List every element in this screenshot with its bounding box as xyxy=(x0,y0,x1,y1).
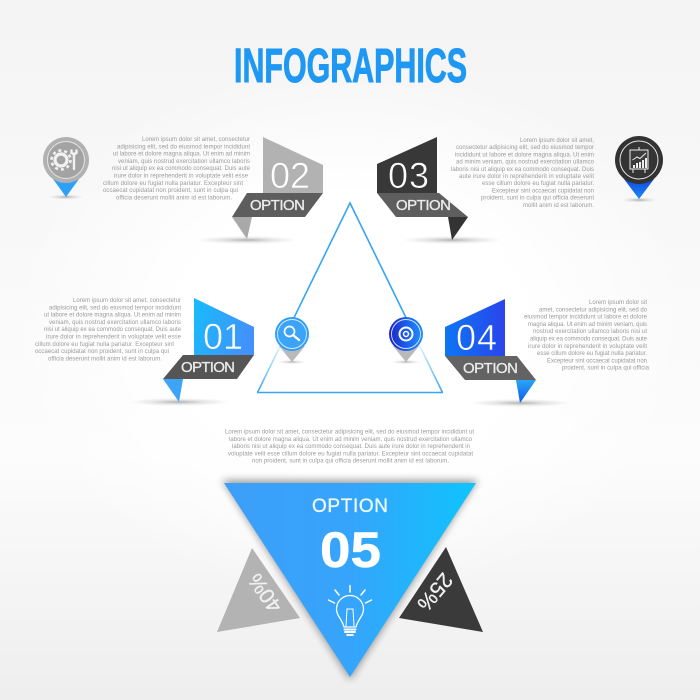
text block: 03: incididunt ut labore et dolore magna aliqua. Ut enim xyxy=(455,152,594,158)
text block: 03: aute irure dolor in reprehenderit in voluptate velit xyxy=(459,174,594,180)
option tag 04 xyxy=(445,299,570,407)
icon: chart board xyxy=(630,147,648,173)
text block: 05: Lorem ipsum dolor sit amet, consectetur adipisicing elit, sed do eiusmod tempor incididunt ut xyxy=(225,430,474,436)
option tag 01: 01 xyxy=(203,316,243,357)
side flag: 40%: 40% xyxy=(244,569,287,617)
main triangle: option 05: OPTION xyxy=(312,496,388,517)
text block: 01: occaecat cupidatat non proident, sunt in culpa qui xyxy=(35,349,169,355)
text block: 02: adipisicing elit, sed do eiusmod tempor incididunt xyxy=(117,144,250,150)
icon: wrench xyxy=(72,150,76,169)
text block: 01: irure dolor in reprehenderit in voluptate velit esse xyxy=(46,334,182,340)
text block: 02: Lorem ipsum dolor sit amet, consectetur xyxy=(142,137,250,143)
text block: 05: non proident, sunt in culpa qui officia deserunt mollit anim id est laborum. xyxy=(252,459,449,465)
side flag: 25%: 25% xyxy=(412,568,457,615)
main triangle: option 05: 05 xyxy=(320,522,381,578)
main triangle: option 05 xyxy=(222,480,478,680)
option tag 02 xyxy=(197,137,323,244)
text block: 03: Lorem ipsum dolor sit amet, xyxy=(520,138,594,144)
text block: 04: eiusmod tempor incididunt ut labore et dolore xyxy=(524,315,648,321)
text block: 04: nostrud exercitation ullamco laboris nisi ut xyxy=(533,329,647,335)
pin: target xyxy=(389,317,423,364)
option tag 02: OPTION xyxy=(250,197,305,214)
text block: 04: irure dolor in reprehenderit in voluptate velit xyxy=(528,344,647,350)
text block: 03: proident, sunt in culpa qui officia deserunt xyxy=(481,196,594,202)
text block: 03: consectetur adipisicing elit, sed do eiusmod tempor xyxy=(456,145,594,151)
icon: magnifier xyxy=(284,326,299,340)
text block: 04: proident, sunt in culpa qui officia xyxy=(562,366,650,372)
text block: 02: veniam, quis nostrud exercitation ullamco laboris xyxy=(118,159,250,165)
icon: light bulb xyxy=(328,586,372,635)
pin: search xyxy=(275,317,309,364)
pin: gear and wrench xyxy=(43,137,89,200)
text block: 01: adipisicing elit, sed do eiusmod tempor incididunt xyxy=(49,305,181,311)
option tag 02: 02 xyxy=(270,155,310,196)
option tag 01: OPTION xyxy=(181,359,235,376)
text block: 01: cillum dolore eu fugiat nulla pariatur. Excepteur sint xyxy=(35,342,174,348)
text block: 01: officia deserunt mollit anim id est laborum. xyxy=(48,356,162,362)
text block: 01: veniam, quis nostrud exercitation ullamco laboris xyxy=(49,320,181,326)
option tag 03: OPTION xyxy=(396,197,451,214)
side flag: 40% xyxy=(217,548,300,632)
text block: 01: Lorem ipsum dolor sit amet, consectetur xyxy=(73,298,181,304)
text block: 05: labore et dolore magna aliqua. Ut enim ad minim veniam, quis nostrud exercitation ullamco xyxy=(229,437,473,443)
text block: 03 xyxy=(451,138,595,209)
text block: 02 xyxy=(103,137,251,201)
option tag 04: 04 xyxy=(456,317,497,358)
text block: 04: amet, consectetur adipisicing elit, sed do xyxy=(539,307,648,313)
icon: gear xyxy=(52,150,70,170)
title: INFOGRAPHICS xyxy=(234,40,467,93)
text block: 02: cillum dolore eu fugiat nulla pariatur. Excepteur sint xyxy=(103,181,243,187)
text block: 01 xyxy=(35,298,182,362)
text block: 05: laboris nisi ut aliquip ex ea commodo consequat. Duis aute irure dolor in reprehenderit in xyxy=(232,444,470,450)
option tag 03 xyxy=(377,137,502,244)
text block: 01: nisi ut aliquip ex ea commodo consequat. Duis aute xyxy=(44,327,182,333)
text block: 05 xyxy=(225,430,474,465)
text block: 03: laboris nisi ut aliquip ex ea commodo consequat. Duis xyxy=(451,167,594,173)
text block: 04: aliquip ex ea commodo consequat. Duis aute xyxy=(530,336,648,342)
text block: 04 xyxy=(524,300,650,372)
text block: 02: ut labore et dolore magna aliqua. Ut enim ad minim xyxy=(113,152,250,158)
text block: 02: occaecat cupidatat non proident, sunt in culpa qui xyxy=(103,188,238,194)
text block: 02: nisi ut aliquip ex ea commodo consequat. Duis aute xyxy=(112,166,251,172)
pin: presentation chart xyxy=(615,136,663,202)
option tag 04: OPTION xyxy=(463,360,518,377)
text block: 02: officia deserunt mollit anim id est laborum. xyxy=(116,195,232,201)
text block: 02: irure dolor in reprehenderit in voluptate velit esse xyxy=(114,174,249,180)
text block: 03: esse cillum dolore eu fugiat nulla pariatur. xyxy=(482,181,594,187)
text block: 03: Excepteur sint occaecat cupidatat non xyxy=(492,188,594,194)
text block: 04: esse cillum dolore eu fugiat nulla pariatur. xyxy=(537,351,647,357)
text block: 03: mollit anim id est laborum. xyxy=(523,203,594,209)
option tag 01 xyxy=(129,298,254,406)
outline triangle xyxy=(257,203,443,392)
icon: target xyxy=(400,328,412,340)
text block: 04: Lorem ipsum dolor sit xyxy=(589,300,647,306)
text block: 03: ad minim veniam, quis nostrud exercitation ullamco xyxy=(456,160,595,166)
text block: 05: voluptate velit esse cillum dolore eu fugiat nulla pariatur. Excepteur sint occaecat cupidatat xyxy=(228,451,473,457)
option tag 03: 03 xyxy=(388,155,429,196)
text block: 04: magna aliqua. Ut enim ad minim veniam, quis xyxy=(528,322,647,328)
side flag: 25% xyxy=(399,547,483,632)
text block: 04: Excepteur sint occaecat cupidatat non xyxy=(547,358,647,364)
text block: 01: ut labore et dolore magna aliqua. Ut enim ad minim xyxy=(44,313,181,319)
